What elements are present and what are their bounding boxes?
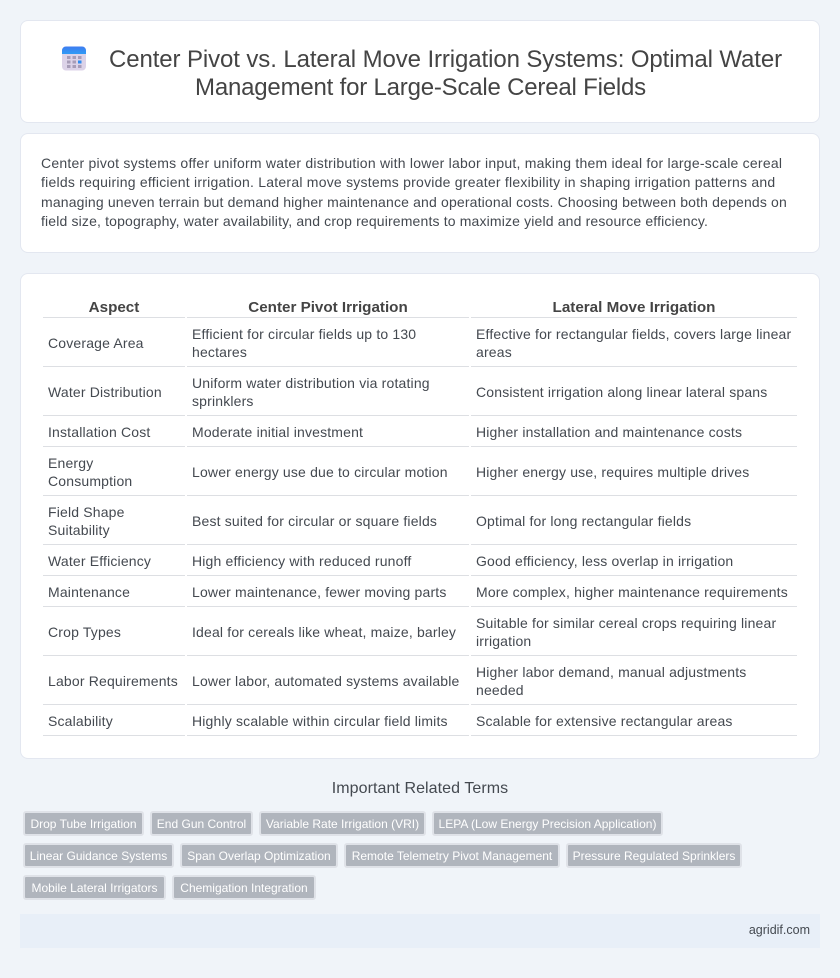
text block: summary: Center pivot systems offer uniform water distribution with lower labor input, making them ideal for large-scale cereal bbox=[41, 155, 782, 171]
comparison table: Lower maintenance, fewer moving parts bbox=[192, 584, 447, 600]
text block: summary: fields requiring efficient irrigation. Lateral move systems provide greater flexibility in shaping irrigation patterns and bbox=[41, 174, 775, 190]
tag: LEPA (Low Energy Precision Application) bbox=[439, 817, 656, 831]
tag bbox=[23, 875, 166, 900]
comparison table: Higher labor demand, manual adjustments bbox=[476, 664, 746, 680]
comparison table: Scalable for extensive rectangular areas bbox=[476, 713, 733, 729]
comparison table bbox=[43, 299, 797, 736]
tag: Pressure Regulated Sprinklers bbox=[573, 849, 735, 863]
comparison table: Ideal for cereals like wheat, maize, barley bbox=[192, 624, 456, 640]
footer source text: agridif.com bbox=[749, 923, 810, 937]
tag: Chemigation Integration bbox=[180, 881, 308, 895]
comparison table: Uniform water distribution via rotating bbox=[192, 375, 430, 391]
comparison table: Water Distribution bbox=[48, 384, 162, 400]
tag bbox=[150, 811, 253, 836]
comparison table: Best suited for circular or square fields bbox=[192, 513, 437, 529]
tag bbox=[180, 843, 338, 868]
tag: End Gun Control bbox=[157, 817, 246, 831]
panel: related term tags bbox=[23, 811, 742, 900]
title bbox=[109, 46, 782, 101]
tag bbox=[566, 843, 742, 868]
panel: comparison table bbox=[20, 273, 820, 759]
comparison table: Efficient for circular fields up to 130 bbox=[192, 326, 416, 342]
footer bbox=[20, 914, 820, 948]
comparison table: Field Shape bbox=[48, 504, 125, 520]
comparison table: High efficiency with reduced runoff bbox=[192, 553, 411, 569]
title: Management for Large-Scale Cereal Fields bbox=[195, 74, 646, 101]
tag bbox=[23, 811, 144, 836]
icon: calendar bbox=[62, 46, 86, 70]
comparison table: Optimal for long rectangular fields bbox=[476, 513, 691, 529]
comparison table: Lateral Move Irrigation bbox=[553, 299, 715, 316]
comparison table: Labor Requirements bbox=[48, 673, 178, 689]
heading: related terms: Important Related Terms bbox=[332, 780, 508, 797]
title: Center Pivot vs. Lateral Move Irrigation Systems: Optimal Water bbox=[109, 46, 782, 73]
comparison table: Water Efficiency bbox=[48, 553, 151, 569]
tag bbox=[344, 843, 560, 868]
comparison table: Aspect bbox=[89, 299, 139, 316]
comparison table: Suitability bbox=[48, 522, 110, 538]
comparison table: Moderate initial investment bbox=[192, 424, 363, 440]
comparison table: Center Pivot Irrigation bbox=[248, 299, 408, 316]
tag: Drop Tube Irrigation bbox=[30, 817, 137, 831]
text block: summary bbox=[41, 155, 787, 229]
comparison table: Highly scalable within circular field limits bbox=[192, 713, 448, 729]
comparison table: Good efficiency, less overlap in irrigation bbox=[476, 553, 733, 569]
tag: Mobile Lateral Irrigators bbox=[31, 881, 158, 895]
tag: Linear Guidance Systems bbox=[30, 849, 167, 863]
comparison table: More complex, higher maintenance requirements bbox=[476, 584, 788, 600]
comparison table: needed bbox=[476, 682, 524, 698]
comparison table: Energy bbox=[48, 455, 93, 471]
comparison table: irrigation bbox=[476, 633, 531, 649]
tag: Remote Telemetry Pivot Management bbox=[352, 849, 552, 863]
text block: summary: managing uneven terrain but demand higher maintenance and operational costs. Choosing between both depends on bbox=[41, 194, 787, 210]
tag bbox=[172, 875, 316, 900]
comparison table: Scalability bbox=[48, 713, 113, 729]
comparison table: Coverage Area bbox=[48, 335, 144, 351]
comparison table: Installation Cost bbox=[48, 424, 150, 440]
text block: summary: field size, topography, water availability, and crop requirements to maximize yield and resource efficiency. bbox=[41, 213, 708, 229]
comparison table: Suitable for similar cereal crops requiring linear bbox=[476, 615, 776, 631]
comparison table: Maintenance bbox=[48, 584, 130, 600]
comparison table: Consistent irrigation along linear lateral spans bbox=[476, 384, 767, 400]
panel: title header bbox=[20, 20, 820, 123]
tag: Variable Rate Irrigation (VRI) bbox=[266, 817, 419, 831]
comparison table: sprinklers bbox=[192, 393, 254, 409]
tag bbox=[432, 811, 663, 836]
comparison table: Higher installation and maintenance costs bbox=[476, 424, 742, 440]
tag bbox=[23, 843, 174, 868]
comparison table: hectares bbox=[192, 344, 247, 360]
comparison table: Crop Types bbox=[48, 624, 121, 640]
panel: summary text bbox=[20, 133, 820, 253]
tag bbox=[259, 811, 426, 836]
tag: Span Overlap Optimization bbox=[187, 849, 331, 863]
comparison table: Consumption bbox=[48, 473, 132, 489]
comparison table: Higher energy use, requires multiple drives bbox=[476, 464, 749, 480]
comparison table: areas bbox=[476, 344, 512, 360]
comparison table: Effective for rectangular fields, covers large linear bbox=[476, 326, 791, 342]
comparison table: Lower energy use due to circular motion bbox=[192, 464, 448, 480]
comparison table: Lower labor, automated systems available bbox=[192, 673, 460, 689]
